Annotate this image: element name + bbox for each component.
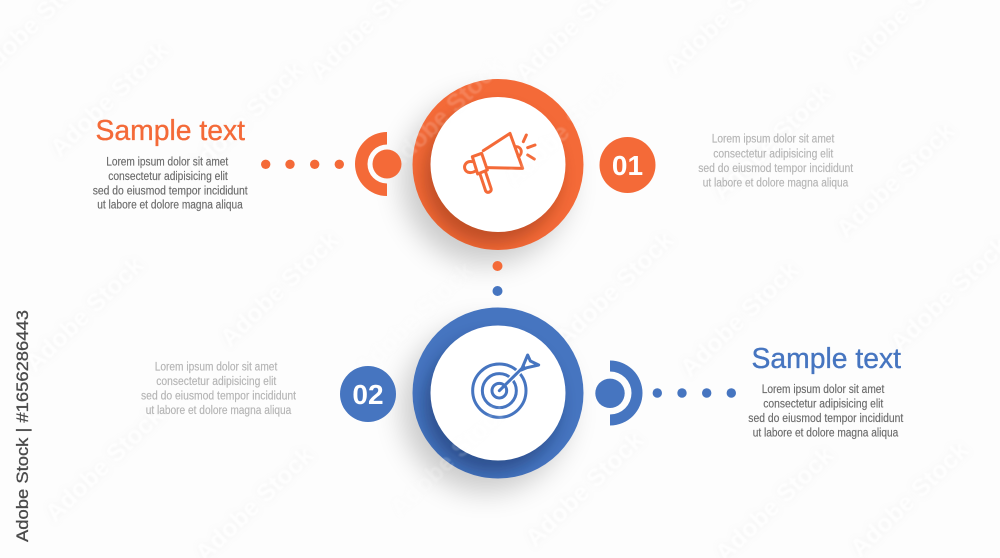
watermark: repeated stock marks: Adobe Stock bbox=[520, 426, 649, 552]
text block: bottom left body: consectetur adipisicing elit bbox=[156, 376, 277, 388]
watermark: faint marks over the rings bbox=[350, 51, 629, 522]
text block: bottom right body: Lorem ipsum dolor sit amet bbox=[762, 384, 885, 396]
badge: 01: 01 bbox=[612, 150, 643, 181]
text block: bottom left body bbox=[141, 362, 297, 417]
watermark: faint marks over the rings: Adobe Stock bbox=[500, 66, 629, 192]
text block: top right body: consectetur adipisicing elit bbox=[713, 148, 834, 160]
icon: target with arrow bbox=[473, 355, 539, 417]
watermark: faint marks over the rings: Adobe Stock bbox=[385, 396, 514, 522]
text block: top left body: consectetur adipisicing elit bbox=[108, 171, 228, 183]
text block: bottom right body: sed do eiusmod tempor incididunt bbox=[748, 413, 904, 425]
badge: 01 bbox=[600, 137, 656, 193]
watermark: repeated stock marks: Adobe Stock bbox=[550, 226, 679, 352]
side label: stock credit: Adobe Stock | #1656286443 bbox=[13, 310, 32, 542]
heading: bottom right sample text: Sample text bbox=[752, 343, 901, 375]
text block: top right body: ut labore et dolore magna aliqua bbox=[703, 177, 849, 189]
watermark: repeated stock marks: Adobe Stock bbox=[707, 79, 836, 205]
text block: bottom right body: consectetur adipisicing elit bbox=[763, 398, 884, 410]
watermark: repeated stock marks: Adobe Stock bbox=[831, 117, 960, 243]
watermark: repeated stock marks: Adobe Stock bbox=[215, 226, 344, 352]
watermark: repeated stock marks: Adobe Stock bbox=[40, 401, 169, 527]
top step: orange ring with megaphone bbox=[402, 79, 584, 264]
watermark: repeated stock marks: Adobe Stock bbox=[45, 36, 174, 162]
text block: bottom left body: ut labore et dolore magna aliqua bbox=[146, 405, 292, 417]
text block: top right body: Lorem ipsum dolor sit amet bbox=[712, 134, 835, 146]
watermark: repeated stock marks: Adobe Stock bbox=[675, 256, 804, 382]
text block: bottom right body bbox=[748, 384, 904, 440]
pointer: blue half ring and dots bbox=[595, 360, 736, 426]
connector dots between steps bbox=[492, 261, 502, 296]
text block: top left body: sed do eiusmod tempor incididunt bbox=[93, 185, 248, 197]
text block: bottom right body: ut labore et dolore magna aliqua bbox=[753, 428, 899, 440]
watermark: faint marks over the rings: Adobe Stock bbox=[380, 51, 509, 177]
badge: 02: 02 bbox=[352, 379, 384, 410]
text block: top left body bbox=[93, 156, 248, 212]
text block: top left body: Lorem ipsum dolor sit amet bbox=[106, 156, 229, 168]
text block: top right body bbox=[698, 134, 854, 189]
bottom step: blue ring with target bbox=[402, 308, 584, 492]
pointer: orange half ring and dots bbox=[261, 132, 402, 196]
text block: top right body: sed do eiusmod tempor incididunt bbox=[698, 163, 854, 175]
text block: bottom left body: sed do eiusmod tempor incididunt bbox=[141, 391, 297, 403]
infographic canvas bbox=[16, 79, 904, 542]
badge: 02 bbox=[340, 366, 396, 422]
icon: megaphone bbox=[465, 133, 535, 192]
text block: bottom left body: Lorem ipsum dolor sit amet bbox=[155, 362, 278, 374]
watermark: repeated stock marks: Adobe Stock bbox=[20, 251, 149, 377]
watermark: faint marks over the rings: Adobe Stock bbox=[350, 256, 479, 382]
text block: top left body: ut labore et dolore magna aliqua bbox=[97, 200, 243, 212]
heading: top left sample text: Sample text bbox=[96, 115, 245, 147]
watermark: repeated stock marks: Adobe Stock bbox=[180, 56, 309, 182]
